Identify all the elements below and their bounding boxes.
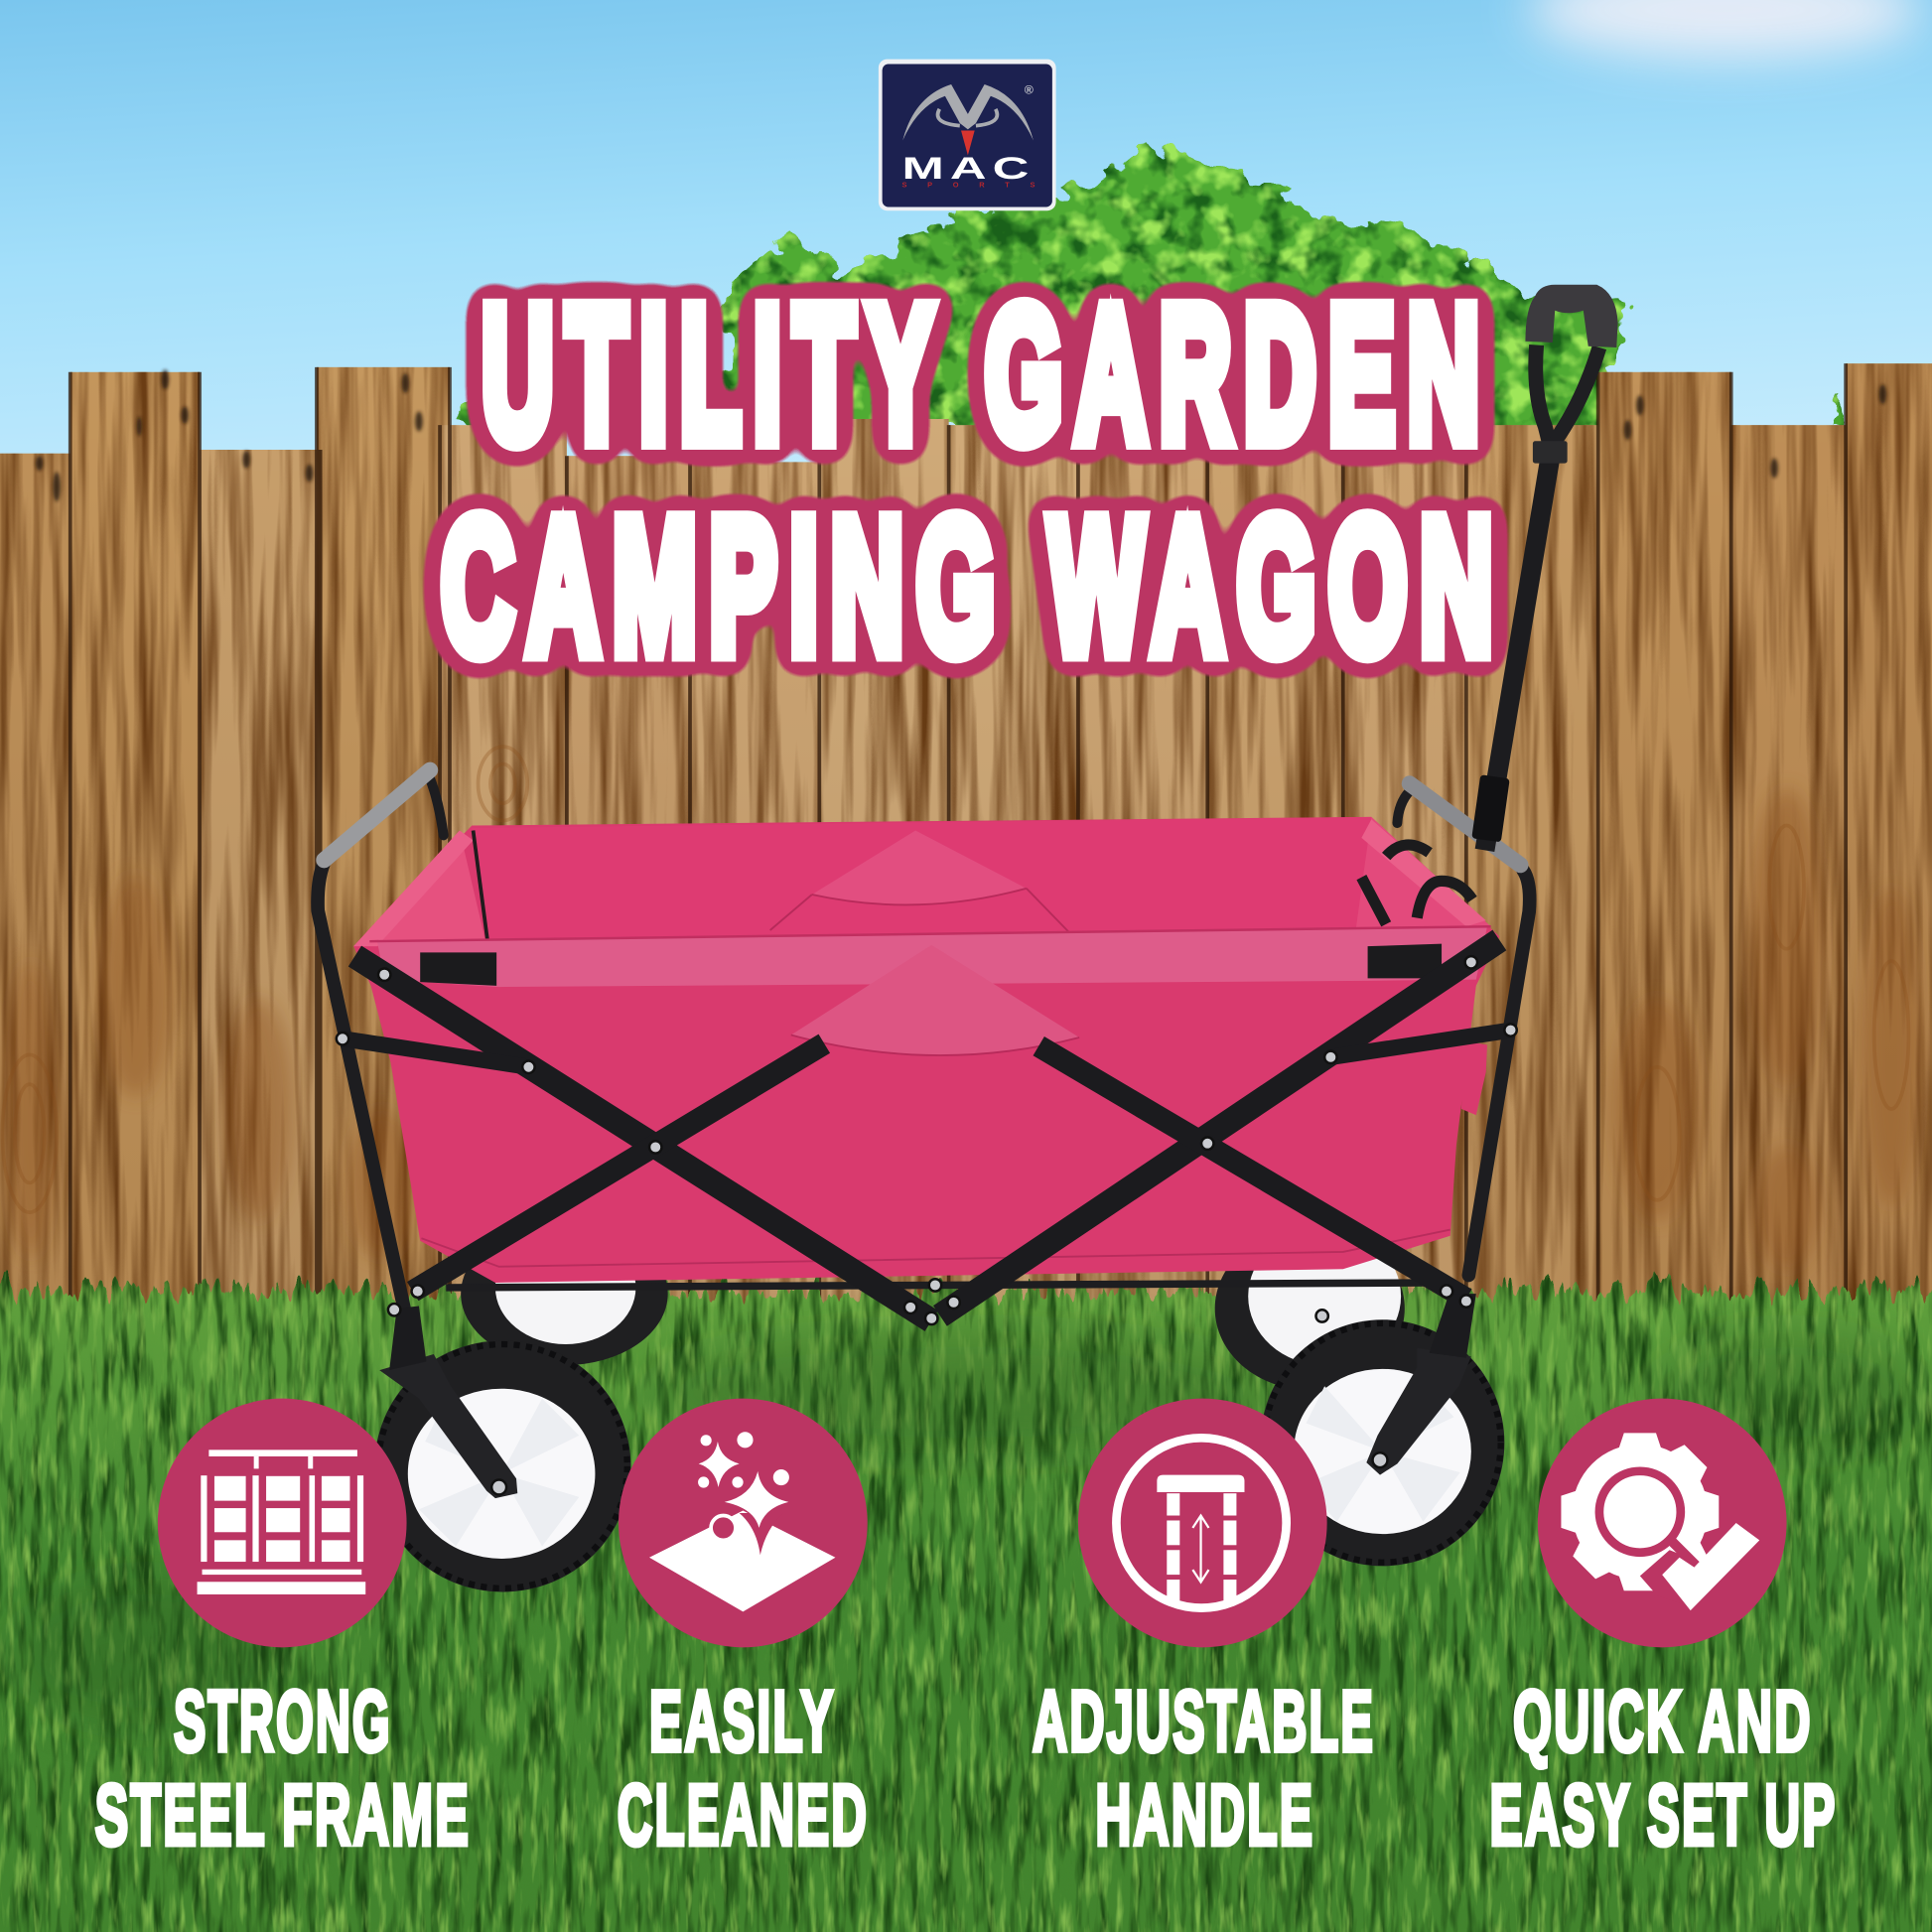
front upper band: [377, 926, 1487, 987]
brand sub-name: SPORTS: [901, 181, 1035, 190]
feature 4: quick and easy set up: [1489, 1399, 1837, 1863]
pull handle: [1471, 285, 1618, 850]
right side straps: [1361, 845, 1472, 924]
label: ADJUSTABLE: [1033, 1674, 1375, 1770]
grass shading patches: [12, 1330, 1922, 1725]
icon: sparkling clean surface: [619, 1399, 868, 1647]
brand name: MAC: [901, 151, 1035, 186]
front right wheel: [1261, 1319, 1504, 1566]
cloud: [1528, 0, 1922, 60]
rear wheels: [461, 1222, 1405, 1390]
back pocket flap: [812, 830, 1027, 904]
bottom bar: [446, 1283, 1450, 1288]
registered mark: ®: [1025, 82, 1034, 96]
bush behind fence: [454, 145, 1849, 431]
label: STEEL FRAME: [95, 1767, 471, 1863]
wooden fence: [0, 357, 1932, 1343]
folding X braces: [343, 940, 1512, 1320]
frame rails: [318, 770, 1530, 1309]
bottom seam: [421, 1230, 1450, 1267]
label: [95, 1674, 471, 1863]
label: EASILY: [649, 1674, 835, 1770]
grass: [0, 1292, 1932, 1932]
label: CLEANED: [618, 1767, 869, 1863]
rear frame posts: [430, 778, 1410, 835]
straps: [420, 952, 496, 986]
label: HANDLE: [1095, 1767, 1314, 1863]
wagon fabric body: [353, 817, 1499, 1283]
icon: adjustable handle: [1078, 1399, 1327, 1647]
caster forks: [379, 1294, 1476, 1498]
feature 3: adjustable handle: [1033, 1399, 1375, 1863]
logo: MAC Sports badge: [879, 60, 1056, 210]
logo mark: [902, 84, 1034, 155]
front pocket flap: [791, 945, 1079, 1055]
frame bolts: [337, 956, 1517, 1494]
wagon: [318, 285, 1618, 1591]
icon: steel frame: [158, 1399, 407, 1647]
feature 1: strong steel frame: [95, 1399, 471, 1863]
label: [1033, 1674, 1375, 1863]
label: [618, 1674, 869, 1863]
front left wheel: [374, 1340, 630, 1591]
feature 2: easily cleaned: [618, 1399, 869, 1863]
icon: gear, magnifier and check: [1538, 1399, 1787, 1647]
label: STRONG: [174, 1674, 392, 1770]
label: [1489, 1674, 1837, 1863]
title: [441, 267, 1506, 693]
background: sky: [0, 0, 1932, 517]
inner back wall: [472, 817, 1371, 946]
side tag: [1461, 1041, 1487, 1115]
